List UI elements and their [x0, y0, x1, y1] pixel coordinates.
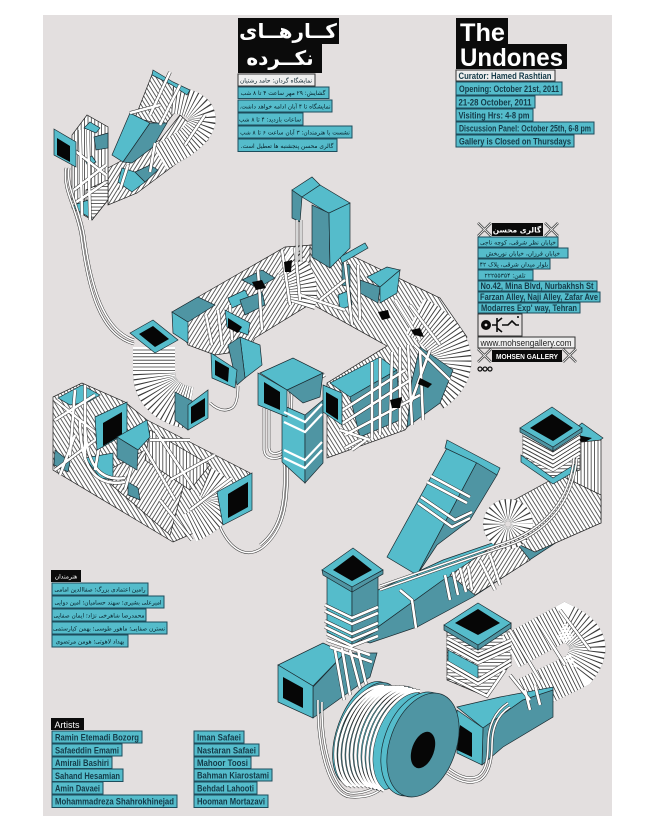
Persian title block [238, 18, 339, 73]
English artists column 1: Safaeddin Emami [55, 746, 119, 756]
column face B [323, 385, 342, 425]
English artists column 2: Iman Safaei [197, 732, 241, 742]
English details: Gallery is Closed on Thursdays [459, 136, 571, 146]
English artists column 2: Behdad Lahooti [197, 784, 254, 794]
block [117, 420, 150, 470]
gallery info block: تلفن: ۲۲۲۵۵۳۵۴ [485, 272, 526, 280]
face upper [95, 402, 127, 450]
Persian artists: هنرمندان [55, 574, 77, 580]
English artists column 2: Nastaran Safaei [197, 746, 256, 756]
illustration: lower-left duct [53, 383, 252, 542]
Persian details: ساعات بازدید: ۴ تا ۸ شب [239, 118, 301, 124]
small logo [478, 367, 492, 371]
Persian details: نمایشگاه گردان: حامد رشتیان [240, 76, 312, 84]
English artists column 2: Hooman Mortazavi [197, 796, 265, 806]
slanted duct [387, 440, 500, 575]
Persian artists [51, 570, 167, 647]
Persian details: گشایش: ۲۹ مهر ساعت ۴ تا ۸ شب [241, 89, 326, 97]
gallery name [478, 349, 576, 362]
right U body [447, 623, 511, 697]
U cap [444, 603, 511, 650]
English artists column 1: Ramin Etemadi Bozorg [55, 732, 139, 742]
gallery info block: No.42, Mina Blvd, Nurbakhsh St [480, 281, 594, 291]
wrapped cap body [521, 430, 580, 484]
English artists column 2 [194, 731, 272, 808]
column with large face [258, 358, 323, 483]
spool [320, 673, 472, 807]
black slots on ring [252, 260, 432, 408]
website: www.mohsengallery.com [480, 338, 572, 348]
gallery header [478, 223, 558, 236]
inner face A [225, 310, 250, 335]
gallery name: MOHSEN GALLERY [496, 352, 558, 361]
English title block: The [460, 19, 505, 47]
English artists column 1: Sahand Hesamian [55, 771, 120, 781]
illustration: top-left V duct [54, 70, 208, 344]
English details: Curator: Hamed Rashtian [458, 71, 552, 81]
English details: Opening: October 21st, 2011 [459, 84, 559, 94]
top cap [520, 407, 582, 451]
Persian artists: رامین اعتمادی بزرگ؛ صفاالدین امامی [54, 586, 146, 594]
cap chimney [322, 548, 383, 592]
English artists column 1: Mohammadreza Shahrokhinejad [55, 796, 174, 806]
chimney [292, 177, 350, 268]
rear cap [562, 423, 603, 457]
face lower [217, 473, 252, 525]
duct opening face [54, 129, 76, 167]
bottom pipe [457, 687, 553, 765]
Persian title block: کــارهــای [239, 19, 337, 43]
Persian artists: بهداد لاهوتی؛ هومن مرتضوی [56, 638, 125, 646]
English details: 21-28 October, 2011 [458, 98, 532, 108]
main diagonal pipe [360, 520, 560, 643]
Persian details: گالری محسن پنجشنبه ها تعطیل است. [241, 142, 334, 150]
English details: Discussion Panel: October 25th, 6-8 pm [459, 124, 591, 134]
English artists column 1: Amin Davaei [55, 784, 100, 794]
gallery logo [478, 314, 522, 336]
English title block [456, 18, 567, 72]
illustration: central ring duct [130, 177, 467, 553]
gallery info block: Modarres Exp' way, Tehran [481, 303, 577, 313]
gallery info block: بلوار میدان شرقی، پلاک ۴۲ [480, 260, 549, 268]
small U cap [130, 320, 178, 353]
English artists column 2: Bahman Kiarostami [197, 770, 269, 780]
English title block: Undones [460, 44, 563, 72]
T chimney [327, 572, 378, 645]
Persian details: نمایشگاه تا ۴ آبان ادامه خواهد داشت. [239, 102, 331, 110]
gallery info block: Farzan Alley, Naji Alley, Zafar Ave [480, 292, 598, 302]
English details [456, 70, 594, 147]
English artists column 1: Amirali Bashiri [55, 758, 109, 768]
English artists column 1 [51, 718, 177, 808]
English artists column 1: Artists [54, 720, 80, 730]
English artists column 2: Mahoor Toosi [197, 758, 248, 768]
gallery info block: خیابان فرزان، خیابان نوربخش [486, 250, 560, 258]
Persian artists: نسترن صفایی؛ ماهور طوسی؛ بهمن کیارستمی [53, 626, 165, 632]
gallery header: گالری محسن [493, 226, 542, 234]
Persian details [238, 74, 352, 152]
English details: Visiting Hrs: 4-8 pm [458, 110, 530, 120]
Persian artists: محمدرضا شاهرخی نژاد؛ ایمان صفایی [54, 612, 144, 620]
Persian details: نشست با هنرمندان: ۳ آبان ساعت ۶ تا ۸ شب [240, 128, 350, 136]
middle duct block and face [211, 337, 262, 388]
U end face [175, 390, 208, 430]
Persian title block: نکــرده [246, 46, 314, 70]
lower-left pipe [278, 643, 377, 718]
gallery info block [478, 223, 600, 371]
gallery info block: خیابان نظر شرقی، کوچه ناجی [480, 240, 556, 246]
illustration: lower-right duct network [278, 407, 603, 807]
Persian artists: امیرعلی بشیری؛ سهند حسامیان؛ امین دوایی [54, 600, 162, 606]
